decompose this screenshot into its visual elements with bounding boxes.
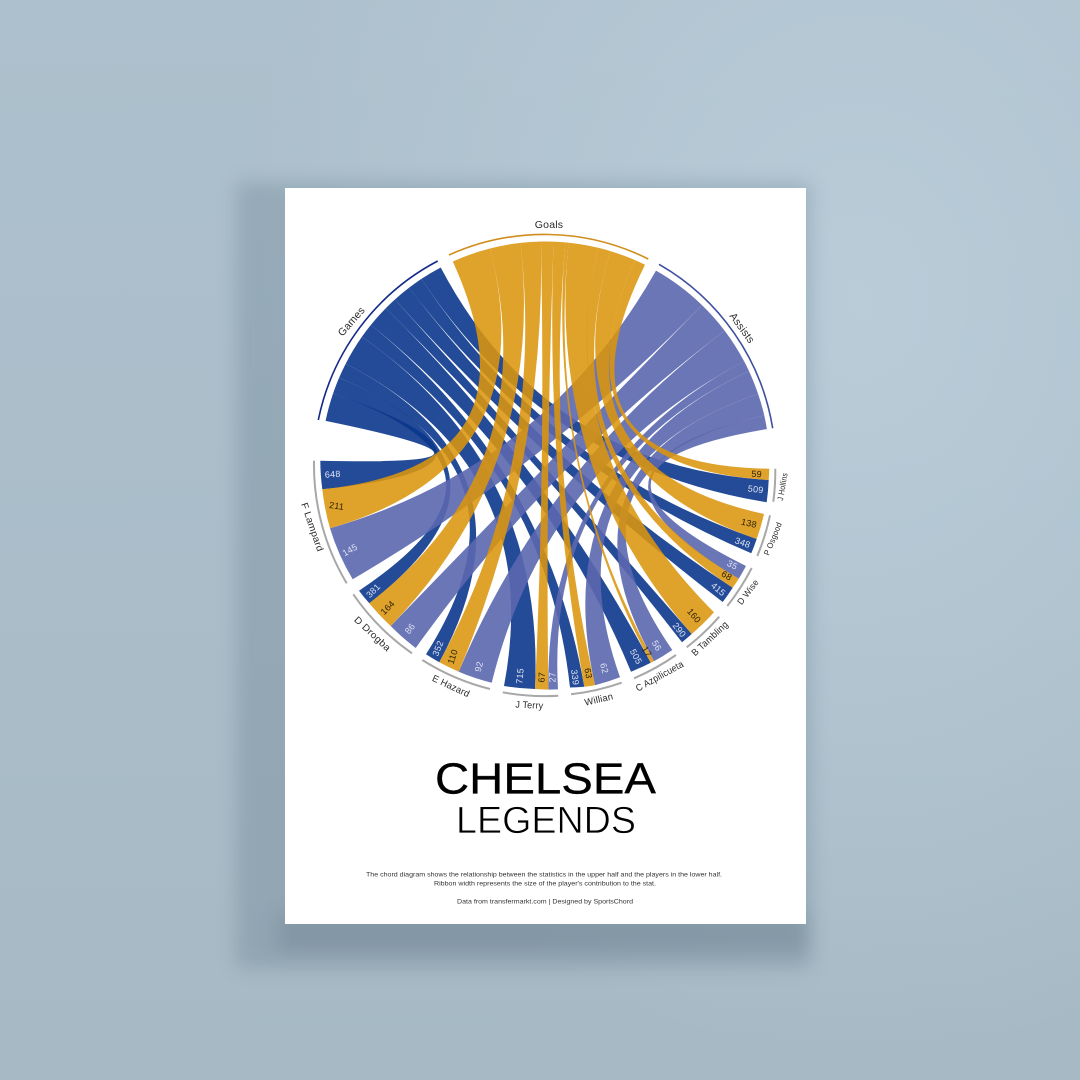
ribbon: Goals to J Hollins [609,260,769,480]
label: Willian: Willian [584,691,614,709]
credit line: Data from transfermarkt.com | Designed by SportsChord [457,898,633,906]
ribbon: Games to Willian [362,325,584,688]
outer arc: Goals [449,234,648,259]
label: J Terry: J Terry [515,699,544,712]
ribbon: Games to F Lampard [320,393,437,489]
ribbon: Assists to F Lampard [330,271,702,579]
value: 164: 164 [379,599,397,617]
arc: C Azpilicueta [634,655,676,678]
value: 339: 339 [569,669,581,686]
label: P Osgood: P Osgood [762,520,784,557]
title: CHELSEA: CHELSEA [435,754,657,804]
label: Games: Games [336,305,368,339]
ribbon: Games to P Osgood [409,279,757,553]
value: 86: 86 [403,621,417,636]
value: 68: 68 [720,569,734,583]
outer arc: Assists [659,264,773,428]
value: 145: 145 [341,542,359,558]
value: 505: 505 [628,647,644,666]
ribbon: Games to D Wise [395,288,733,602]
ribbon: Goals to D Drogba [369,243,524,626]
description line 2: Ribbon width represents the size of the player's contribution to the stat. [434,880,656,888]
ribbons: assists [330,271,767,690]
value: 92: 92 [473,660,485,673]
label: C Azpilicueta: C Azpilicueta [634,659,686,694]
ribbon values [325,469,764,686]
ribbon: Games to B Tambling [386,300,692,642]
ribbon: Assists to E Hazard [459,331,744,683]
poster shadow [236,182,811,968]
arc: F Lampard [314,461,347,583]
ribbon: Goals to Willian [552,242,595,687]
label: D Wise: D Wise [735,577,761,607]
value: 211: 211 [329,500,345,512]
ribbon: Goals to J Terry [535,241,554,690]
value: 62: 62 [598,662,610,675]
value: 415: 415 [709,580,728,598]
ribbon: Assists to D Drogba [391,305,725,648]
arc: J Terry [503,692,558,696]
ribbon: Assists to Willian [585,371,758,685]
ribbon: Goals to B Tambling [565,243,714,634]
value: 509: 509 [747,483,764,495]
outer arc: Games [318,261,438,420]
arc: Willian [571,683,622,694]
ribbon: Goals to D Wise [587,248,739,588]
label: Goals: Goals [535,219,563,231]
ribbon: Games to J Terry [346,337,536,689]
ribbon: Assists to C Azpilicueta [617,394,764,661]
player arcs [314,461,775,696]
value: 290: 290 [671,621,688,639]
subtitle: LEGENDS: LEGENDS [456,800,636,842]
ribbon: Games to C Azpilicueta [371,308,651,672]
value: 648: 648 [325,469,341,480]
poster shadow, bottom band [278,915,808,951]
ribbon: Goals to F Lampard [322,248,501,528]
value: 110: 110 [446,648,460,665]
ribbon: Goals to E Hazard [439,242,541,672]
ribbon: Goals to C Azpilicueta [562,242,654,663]
value: 352: 352 [430,639,446,657]
ribbon: Assists to J Terry [548,361,749,690]
value: 17: 17 [640,645,654,659]
ribbon: Games to E Hazard [339,364,476,662]
value: 160: 160 [685,606,703,625]
arc: E Hazard [422,660,490,689]
value: 27: 27 [547,672,557,683]
label: F Lampard: F Lampard [298,501,325,553]
value: 63: 63 [582,667,594,679]
arc: P Osgood [757,515,770,556]
value: 67: 67 [537,672,547,683]
value: 715: 715 [514,668,526,684]
description line 1: The chord diagram shows the relationship between the statistics in the upper half and the players in the lower half. [366,872,722,878]
arc: D Drogba [353,594,412,653]
chord diagram [298,219,790,712]
stat and player labels [298,219,790,712]
ribbon: Goals to P Osgood [595,251,764,539]
arc: J Hollins [773,469,775,502]
ribbon: Assists to D Wise [648,416,767,579]
ribbon: Games to J Hollins [421,268,769,502]
ribbon: Games to D Drogba [333,378,450,603]
ribbons: games [320,268,769,689]
value: 381: 381 [364,582,382,600]
label: Assists: Assists [727,311,757,346]
value: 35: 35 [725,558,739,572]
value: 59: 59 [751,469,762,479]
value: 138: 138 [740,517,758,530]
poster content [298,219,790,906]
label: D Drogba: D Drogba [351,615,393,654]
ribbons: goals [322,241,769,690]
poster sheet [285,188,806,924]
arc: D Wise [727,568,752,606]
label: E Hazard: E Hazard [430,673,471,700]
label: J Hollins: J Hollins [775,472,790,501]
arc: B Tambling [687,617,719,647]
value: 348: 348 [734,535,752,550]
description text [366,872,722,906]
label: B Tambling: B Tambling [690,619,731,659]
value: 56: 56 [650,639,664,653]
